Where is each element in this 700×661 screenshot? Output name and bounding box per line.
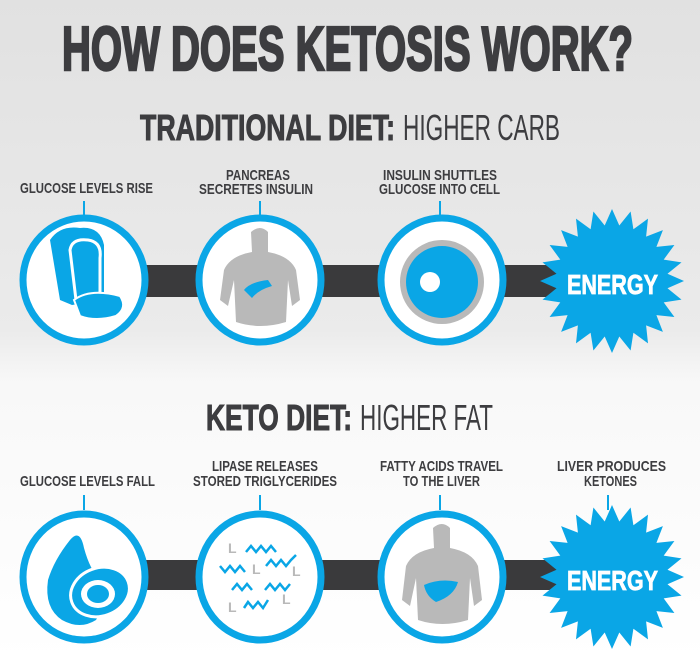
- row 2 labels: STORED TRIGLYCERIDES: [193, 473, 337, 490]
- row 2 labels: LIPASE RELEASES: [212, 458, 318, 475]
- step 1: bread icon: [23, 218, 145, 342]
- row 1 connector bar: [140, 265, 580, 297]
- energy starburst 1: ENERGY: [567, 269, 658, 300]
- heading: keto diet: KETO DIET:: [206, 397, 352, 438]
- heading: keto diet: [206, 397, 493, 438]
- step 2: lipase and triglycerides icon: L: [228, 599, 237, 615]
- step 2: lipase and triglycerides icon: L: [252, 561, 261, 577]
- row 2 labels: TO THE LIVER: [403, 473, 480, 490]
- row 2 labels: GLUCOSE LEVELS FALL: [20, 473, 155, 490]
- step 2: lipase and triglycerides icon: [199, 514, 321, 640]
- step 2: lipase and triglycerides icon: L: [228, 540, 237, 556]
- row 2 connector bar: [140, 560, 580, 590]
- energy starburst 2: [540, 505, 684, 649]
- step 2: lipase and triglycerides icon: L: [282, 591, 291, 607]
- row 1 labels: INSULIN SHUTTLES: [383, 167, 497, 184]
- row 1 labels: GLUCOSE INTO CELL: [379, 181, 500, 198]
- energy starburst 1: [540, 209, 684, 353]
- heading: traditional diet: TRADITIONAL DIET:: [140, 107, 395, 148]
- row 2 labels: KETONES: [584, 473, 637, 490]
- step 2: lipase and triglycerides icon: L: [292, 563, 301, 579]
- energy starburst 2: ENERGY: [567, 565, 658, 596]
- step 2: person with pancreas: [199, 218, 321, 342]
- row 2 labels: LIVER PRODUCES: [557, 458, 666, 475]
- heading: traditional diet: HIGHER CARB: [403, 107, 560, 148]
- row 1 labels: SECRETES INSULIN: [199, 181, 313, 198]
- row 1 labels: [20, 167, 500, 216]
- heading: keto diet: HIGHER FAT: [360, 397, 493, 438]
- row 1 labels: GLUCOSE LEVELS RISE: [20, 180, 153, 197]
- step 1: avocado icon: [23, 514, 145, 640]
- row 1 labels: PANCREAS: [226, 167, 290, 184]
- step 3: person with liver: [381, 514, 503, 640]
- step 3: cell icon: [381, 218, 503, 342]
- row 2 labels: FATTY ACIDS TRAVEL: [380, 458, 503, 475]
- row 2 labels: [20, 458, 666, 510]
